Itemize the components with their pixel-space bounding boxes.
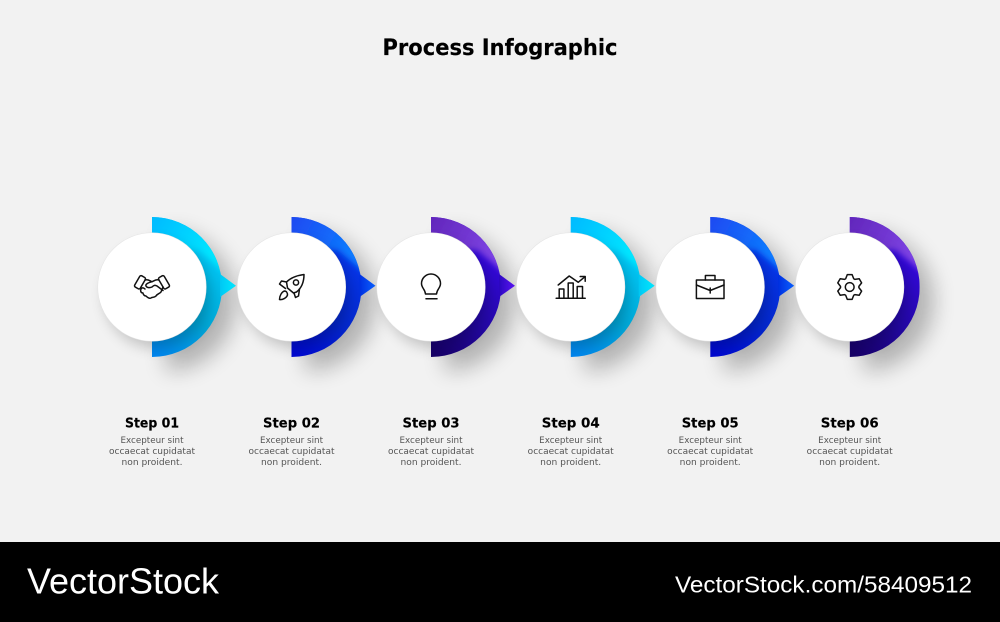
step 5 text: non proident. (680, 458, 741, 468)
step 2 graphic (237, 197, 386, 371)
icon: bar chart with arrow (556, 276, 585, 298)
icon: gear (838, 275, 862, 299)
step 6 text: Excepteur sint (818, 436, 882, 446)
icon: handshake (134, 275, 170, 298)
step 5 text (667, 416, 754, 468)
step 4 text: occaecat cupidatat (528, 447, 614, 457)
step 5 text: occaecat cupidatat (667, 447, 754, 457)
step 4 text (528, 416, 614, 468)
step 6 text: non proident. (819, 458, 880, 468)
step 6 text (807, 416, 893, 468)
step 3 text: non proident. (400, 458, 462, 468)
step 5 graphic (656, 197, 805, 371)
step 2 text: occaecat cupidatat (248, 447, 335, 457)
icon: briefcase (696, 276, 724, 298)
step 4 graphic (516, 197, 666, 371)
step 1 text (109, 416, 196, 468)
step 1 text: non proident. (122, 458, 182, 468)
step 2 text (248, 416, 335, 468)
step 2 text: Step 02 (263, 416, 320, 432)
step 4 text: Excepteur sint (539, 436, 603, 446)
step 1 text: Excepteur sint (120, 436, 184, 446)
step 6 graphic (795, 197, 945, 371)
step 6 text: occaecat cupidatat (807, 447, 893, 457)
title: Process Infographic (382, 36, 618, 61)
step 3 graphic (376, 197, 526, 371)
step 2 text: Excepteur sint (260, 436, 324, 446)
step 5 text: Step 05 (682, 416, 739, 432)
step 1 text: Step 01 (125, 416, 179, 432)
step 3 text: Excepteur sint (400, 436, 463, 446)
step 1 text: occaecat cupidatat (109, 447, 196, 457)
footer logo text: VectorStock (27, 560, 220, 602)
icon: rocket (280, 274, 304, 300)
step 2 text: non proident. (261, 458, 322, 468)
step 3 text: Step 03 (402, 416, 460, 432)
step 6 text: Step 06 (821, 416, 879, 432)
step 5 text: Excepteur sint (679, 436, 742, 446)
step 4 text: Step 04 (542, 416, 600, 432)
footer url text: VectorStock.com/58409512 (675, 572, 972, 598)
step 4 text: non proident. (540, 458, 601, 468)
step 1 graphic (98, 197, 247, 371)
step 3 text (388, 416, 475, 468)
footer bar (0, 542, 1000, 622)
step 3 text: occaecat cupidatat (388, 447, 475, 457)
icon: light bulb (422, 274, 440, 299)
